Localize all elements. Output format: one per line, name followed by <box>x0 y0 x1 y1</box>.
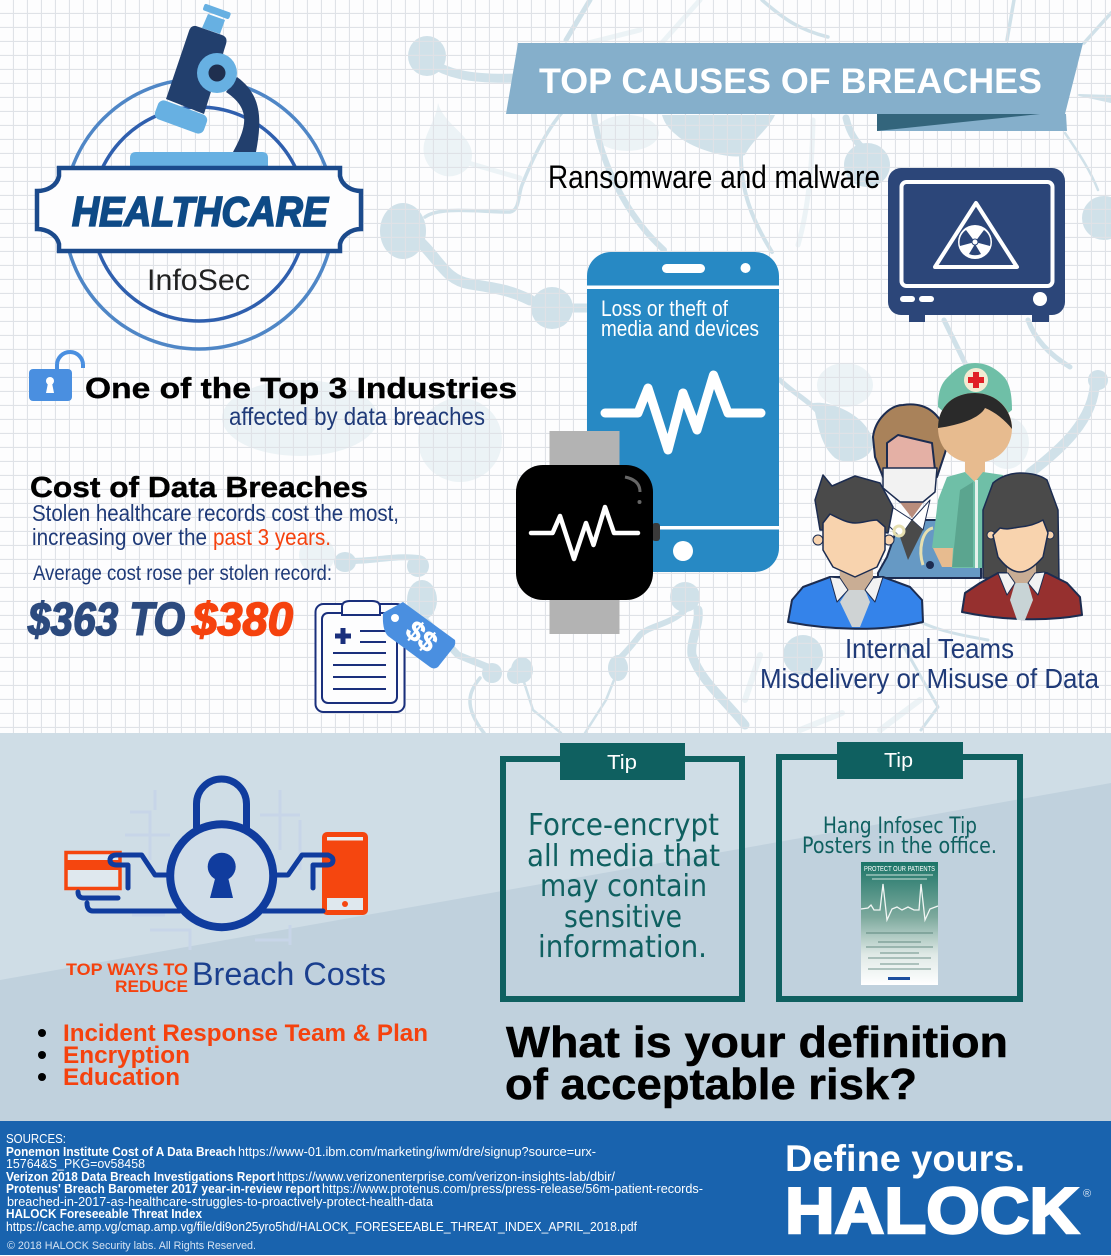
icon: open padlock <box>29 352 83 401</box>
neuron background network <box>222 0 1111 733</box>
person: nurse <box>932 363 1012 568</box>
tip card: hang posters: Tip <box>884 750 913 772</box>
sources list: Ponemon Institute Cost of A Data Breach <box>6 1144 236 1159</box>
subheading: InfoSec: InfoSec <box>147 264 250 297</box>
sources list: Protenus' Breach Barometer 2017 year-in-review report <box>6 1181 321 1196</box>
stat: 363 to: $363 TO <box>27 593 185 645</box>
footer bar <box>0 1121 1111 1255</box>
label: internal teams: Internal Teams <box>845 633 1014 664</box>
sources list <box>6 1131 703 1252</box>
text: top ways to: TOP WAYS TO <box>66 960 188 979</box>
icon: microscope <box>130 3 268 166</box>
tip text: Force-encrypt <box>528 808 719 843</box>
list: ways to reduce: Education <box>63 1064 180 1091</box>
tip text <box>527 808 720 965</box>
cost of data breaches <box>27 472 455 712</box>
banner: top causes <box>506 43 1083 131</box>
sources list: https://cache.amp.vg/cmap.amp.vg/file/di9on25yro5hd/HALOCK_FORESEEABLE_THREAT_INDEX_APRIL_2018.pdf <box>6 1219 637 1234</box>
sources list: https://www-01.ibm.com/marketing/iwm/dre/signup?source=urx- <box>238 1144 596 1159</box>
sources list: SOURCES: <box>6 1131 66 1146</box>
text: breach costs: Breach Costs <box>192 956 386 992</box>
tip card: force-encrypt: Tip <box>607 752 637 774</box>
icon: clipboard and price tag: $$ <box>400 614 444 659</box>
grid paper <box>0 0 1111 733</box>
industries callout <box>29 352 517 431</box>
sources list: https://www.protenus.com/press/press-release/56m-patient-records- <box>322 1181 703 1196</box>
brand: halock logo: HALOCK <box>785 1174 1079 1247</box>
text: stolen records: Stolen healthcare records cost the most, <box>32 500 399 526</box>
sources list: breached-in-2017-as-healthcare-struggles-to-proactively-protect-health-data <box>7 1194 434 1209</box>
list: ways to reduce: Incident Response Team & Plan <box>63 1020 428 1047</box>
illustration: internal team people <box>788 363 1082 629</box>
heading: top causes of breaches: TOP CAUSES OF BREACHES <box>539 62 1042 101</box>
sources list: © 2018 HALOCK Security labs. All Rights Reserved. <box>7 1240 256 1252</box>
phone pulse line <box>605 375 761 450</box>
lower panel background <box>0 733 1111 1121</box>
tip text: may contain <box>540 869 707 904</box>
icon: smartwatch <box>516 431 660 634</box>
poster thumbnail <box>861 862 938 985</box>
sources list: HALOCK Foreseeable Threat Index <box>6 1206 203 1221</box>
person: doctor <box>873 404 981 578</box>
icon: smartphone <box>587 252 779 572</box>
sources list: Verizon 2018 Data Breach Investigations Report <box>6 1169 276 1184</box>
icon: monitor with radiation warning <box>888 168 1065 322</box>
text: increasing: increasing over the <box>32 524 207 550</box>
reduce breach costs panel <box>38 779 428 1091</box>
text: media and devices: media and devices <box>601 316 759 341</box>
label: ransomware and malware: Ransomware and malware <box>548 159 880 195</box>
banner frame <box>37 168 361 251</box>
circuit pattern <box>125 790 300 950</box>
heading: HEALTHCARE: HEALTHCARE <box>72 188 330 235</box>
question: acceptable risk: of acceptable risk? <box>505 1060 917 1109</box>
icon: clipboard and price tag <box>316 601 455 712</box>
stat: 380: $380 <box>191 593 293 645</box>
list: ways to reduce: Encryption <box>63 1042 190 1069</box>
person: woman in red <box>962 473 1082 620</box>
tip text: information. <box>538 930 707 965</box>
tip text: Hang Infosec Tip <box>823 814 977 839</box>
poster thumbnail: PROTECT OUR PATIENTS <box>864 866 935 873</box>
icon: padlock with hands <box>66 779 368 927</box>
question: acceptable risk <box>505 1018 1008 1109</box>
person: man in blue <box>788 475 923 629</box>
text: affected by data breaches: affected by data breaches <box>229 403 485 431</box>
tip text: all media that <box>527 839 720 874</box>
text: top 3 industries: One of the Top 3 Industries <box>85 373 517 405</box>
text: average cost: Average cost rose per stolen record: <box>33 562 332 585</box>
text: past 3 years: past 3 years. <box>213 524 331 550</box>
heading: cost: Cost of Data Breaches <box>30 472 368 504</box>
tip card: force-encrypt <box>503 743 742 999</box>
text: loss or theft: Loss or theft of <box>601 296 729 321</box>
text: reduce: REDUCE <box>115 977 188 996</box>
list: ways to reduce <box>38 1020 428 1091</box>
tip text: sensitive <box>564 900 682 935</box>
question: acceptable risk: What is your definition <box>506 1018 1008 1067</box>
brand: halock logo: ® <box>1083 1188 1091 1200</box>
tip card: hang posters <box>779 742 1020 999</box>
badge rings <box>64 79 334 349</box>
brand: define yours: Define yours. <box>785 1138 1025 1179</box>
sources list: 15764&S_PKG=ov58458 <box>6 1156 145 1171</box>
logo: healthcare infosec badge <box>37 3 361 349</box>
tip text: Posters in the office. <box>802 834 997 859</box>
sources list: https://www.verizonenterprise.com/verizon-insights-lab/dbir/ <box>277 1169 615 1184</box>
tip text <box>802 814 997 859</box>
